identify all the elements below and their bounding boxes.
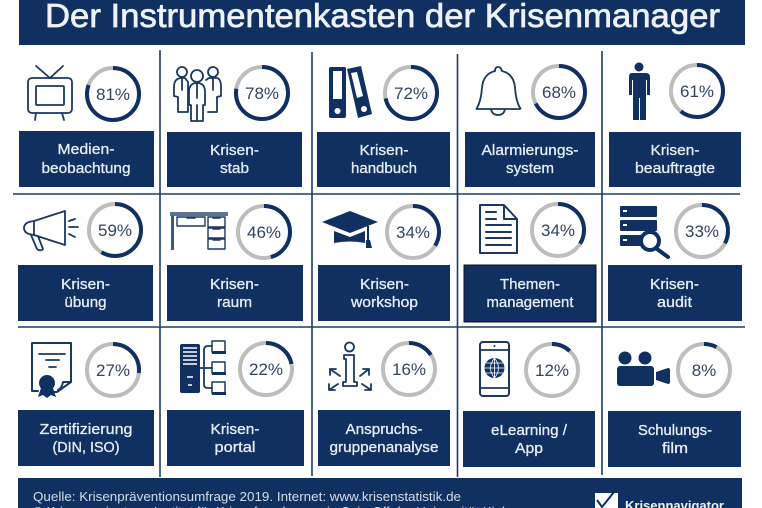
title banner — [19, 0, 745, 45]
label: Zertifizierung — [18, 410, 154, 466]
label: Krisenraum: raum — [217, 294, 252, 311]
label: Krisenbeauftragte: Krisen- — [650, 142, 700, 159]
icon: desk — [170, 212, 228, 250]
label: Krisenbeauftragte: beauftragte — [635, 160, 715, 177]
label: Medienbeobachtung: Medien- — [58, 141, 114, 158]
panel: eLearning / App — [463, 342, 595, 467]
icon: group of people — [174, 67, 221, 121]
panel: Krisenportal — [167, 341, 304, 466]
donut: 46%: 46% — [247, 223, 281, 242]
label: Medienbeobachtung: beobachtung — [42, 160, 130, 177]
label: Krisenportal — [167, 410, 304, 466]
icon: smartphone with globe — [480, 342, 509, 396]
donut: 78%: 78% — [245, 84, 279, 103]
label: Krisenworkshop: Krisen- — [360, 276, 409, 293]
label: Zertifizierung: (DIN, ISO) — [52, 439, 120, 456]
icon: info symbol with arrows — [329, 342, 371, 390]
icon: megaphone — [24, 211, 78, 250]
label: Krisenübung: Krisen- — [61, 276, 110, 293]
label: Krisenhandbuch: Krisen- — [360, 142, 409, 159]
donut: 34%: 34% — [541, 221, 575, 240]
icon: person — [629, 62, 650, 120]
panel: Themenmanagement — [464, 204, 596, 322]
label: Themenmanagement: Themen- — [500, 276, 560, 293]
donut: 12%: 12% — [535, 361, 569, 380]
label: Krisenaudit — [608, 265, 742, 321]
label: Krisenübung: übung — [64, 294, 106, 311]
label: eLearning / App: eLearning / — [491, 422, 568, 439]
icon: server network — [180, 341, 226, 395]
donut: 27%: 27% — [96, 361, 130, 380]
donut: 81%: 81% — [96, 85, 130, 104]
donut: 8%: 8% — [692, 361, 716, 380]
logo: Krisennavigator — [595, 492, 724, 508]
icon: bell — [476, 67, 520, 115]
label: Krisenportal: Krisen- — [210, 421, 260, 438]
label: eLearning / App — [463, 411, 595, 467]
panel: Anspruchsgruppenanalyse — [318, 342, 450, 466]
label: Krisenhandbuch — [317, 132, 450, 187]
label: Anspruchsgruppenanalyse: Anspruchs- — [346, 421, 422, 438]
label: Themenmanagement: management — [486, 294, 574, 311]
panel: Krisenstab — [167, 67, 302, 187]
donut: 59%: 59% — [98, 221, 132, 240]
label: Anspruchsgruppenanalyse — [318, 410, 450, 466]
donut: 22%: 22% — [249, 360, 283, 379]
panel: Krisenaudit — [608, 205, 742, 321]
donut: 72%: 72% — [394, 84, 428, 103]
panel: Krisenworkshop — [318, 206, 450, 321]
source text: Quelle: Krisenpräventionsumfrage 2019. Internet: www.krisenstatistik.de — [33, 489, 461, 504]
panel: Schulungsfilm — [608, 344, 741, 467]
label: Krisenaudit: audit — [657, 294, 693, 311]
icon: server with magnifier — [620, 206, 668, 257]
donut: 61%: 61% — [680, 82, 714, 101]
label: Krisenraum — [167, 265, 303, 321]
label: Krisenübung — [18, 265, 153, 321]
label: Krisenworkshop: workshop — [350, 294, 418, 311]
icon: television — [28, 66, 72, 120]
panel: Krisenübung — [18, 204, 153, 321]
icon: binders — [329, 66, 372, 118]
panel: Alarmierungssystem — [465, 66, 595, 187]
label: eLearning / App: App — [515, 440, 543, 457]
label: Schulungsfilm: Schulungs- — [638, 422, 712, 439]
donut: 34%: 34% — [396, 223, 430, 242]
icon: graduation cap — [322, 211, 378, 248]
panel: Krisenhandbuch — [317, 66, 450, 187]
label: Krisenaudit: Krisen- — [650, 276, 699, 293]
label: Medienbeobachtung — [19, 131, 154, 187]
panel: Zertifizierung — [18, 343, 154, 466]
label: Krisenstab — [167, 132, 302, 187]
icon: video camera — [617, 352, 670, 386]
panel: Krisenbeauftragte — [609, 62, 741, 187]
label: Schulungsfilm: film — [662, 440, 688, 457]
label: Krisenworkshop — [318, 265, 450, 321]
label: Krisenhandbuch: handbuch — [351, 160, 417, 177]
label: Alarmierungssystem — [465, 132, 595, 187]
panel: Medienbeobachtung — [19, 66, 154, 187]
footer band — [18, 478, 742, 508]
label: Krisenstab: Krisen- — [210, 142, 259, 159]
donut: 68%: 68% — [542, 83, 576, 102]
donut: 33%: 33% — [685, 222, 719, 241]
label: Krisenportal: portal — [214, 439, 256, 456]
label: Alarmierungssystem: Alarmierungs- — [482, 142, 578, 159]
label: Krisenstab: stab — [220, 160, 249, 177]
label: Themenmanagement — [464, 265, 596, 322]
label: Krisenbeauftragte — [609, 132, 741, 187]
label: Krisenraum: Krisen- — [210, 276, 259, 293]
icon: document — [480, 205, 517, 253]
panel: Krisenraum — [167, 206, 303, 321]
icon: certificate — [32, 343, 71, 398]
label: Alarmierungssystem: system — [506, 160, 554, 177]
label: Zertifizierung: Zertifizierung — [40, 421, 132, 438]
label: Schulungsfilm — [608, 411, 741, 467]
label: Anspruchsgruppenanalyse: gruppenanalyse — [330, 439, 438, 456]
donut: 16%: 16% — [392, 360, 426, 379]
